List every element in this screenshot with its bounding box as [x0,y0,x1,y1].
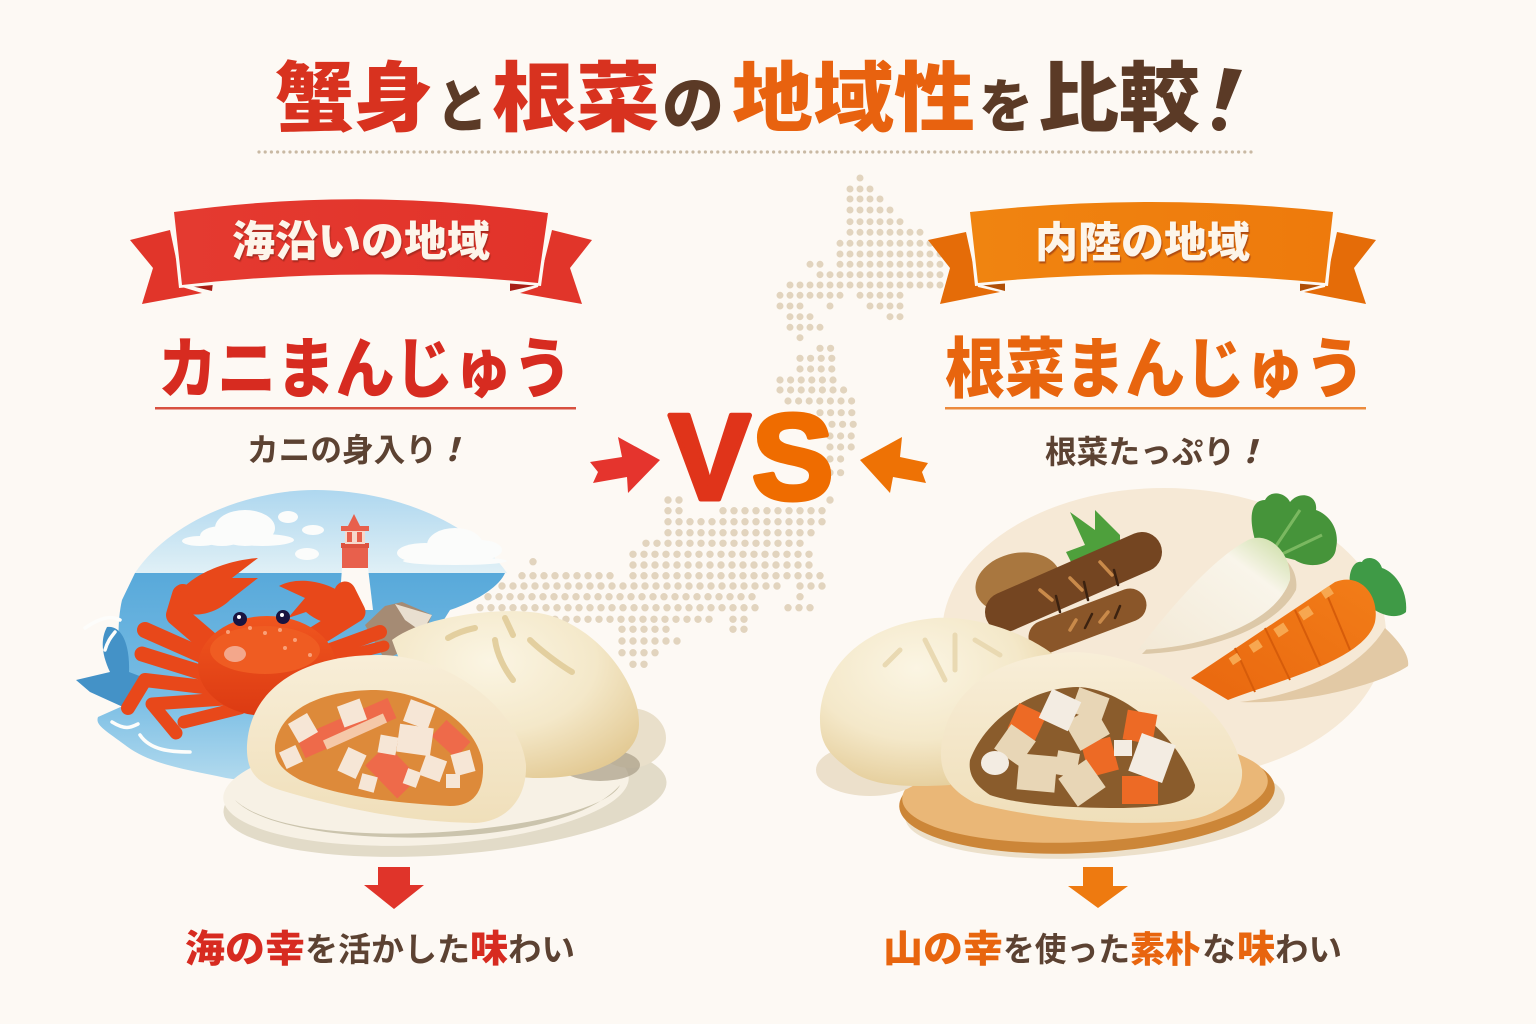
title: 比較 [1038,57,1200,142]
tagline: root vegetables: ！ [1234,434,1266,470]
conclusion: coastal: 味 [470,929,508,971]
ribbon banner: inland [928,201,1376,304]
title: 根菜 [492,57,660,142]
title: 地域性 [732,57,975,142]
icon: crab [128,558,384,733]
conclusion: coastal: わい [508,931,575,968]
ribbon banner: coastal: 海沿いの地域 [232,218,490,265]
tagline: crab: カニの身入り [247,432,437,468]
product name: crab bun: カニまんじゅう [158,332,572,406]
title [275,57,1242,142]
panel: inland region [816,201,1408,971]
conclusion: inland [883,929,1342,971]
illustration: seaside with crab and buns [76,490,671,870]
cut bun with crab filling [247,655,526,823]
product name: root vegetable bun: 根菜まんじゅう [945,332,1365,406]
title: と [436,75,488,140]
back bun [820,618,1062,786]
arrow down: coastal [364,867,424,909]
tagline: crab: ！ [436,432,468,468]
conclusion: coastal: を活かした [305,931,470,968]
clouds [182,510,507,565]
icon: potato [970,545,1066,621]
lighthouse [339,514,373,610]
conclusion: coastal [185,929,575,971]
conclusion: inland: わい [1275,931,1342,968]
title: を [979,75,1033,140]
title: 蟹身 [275,57,433,142]
ribbon banner: inland: 内陸の地域 [1035,219,1250,266]
tagline: root vegetables: 根菜たっぷり [1045,434,1235,470]
icon: burdock root [1005,510,1142,637]
wooden plate [896,728,1287,868]
plate [219,720,671,870]
conclusion: inland: 味 [1237,929,1275,971]
back bun [392,611,639,778]
icon: daikon [1138,493,1337,654]
VS badge: V [669,389,750,525]
arrow: from coast to VS [590,437,660,493]
conclusion: coastal: 海の幸 [185,929,305,971]
title: の [662,72,724,141]
dotted map of Japan [480,178,941,664]
conclusion: inland: 素朴 [1130,929,1200,970]
panel: coastal region [76,199,671,971]
ribbon banner: coastal [130,199,592,304]
conclusion: inland: な [1202,931,1236,968]
arrow down: inland [1068,867,1128,908]
VS badge: S [752,389,833,525]
conclusion: inland: 山の幸 [883,929,1003,971]
cut bun with vegetable filling [941,652,1242,823]
conclusion: inland: を使った [1003,931,1130,968]
VS badge [669,389,833,525]
icon: carrot [1191,558,1406,700]
seaside scene [76,490,507,780]
illustration: root vegetables and buns [816,488,1408,868]
arrow: from inland to VS [860,437,928,493]
